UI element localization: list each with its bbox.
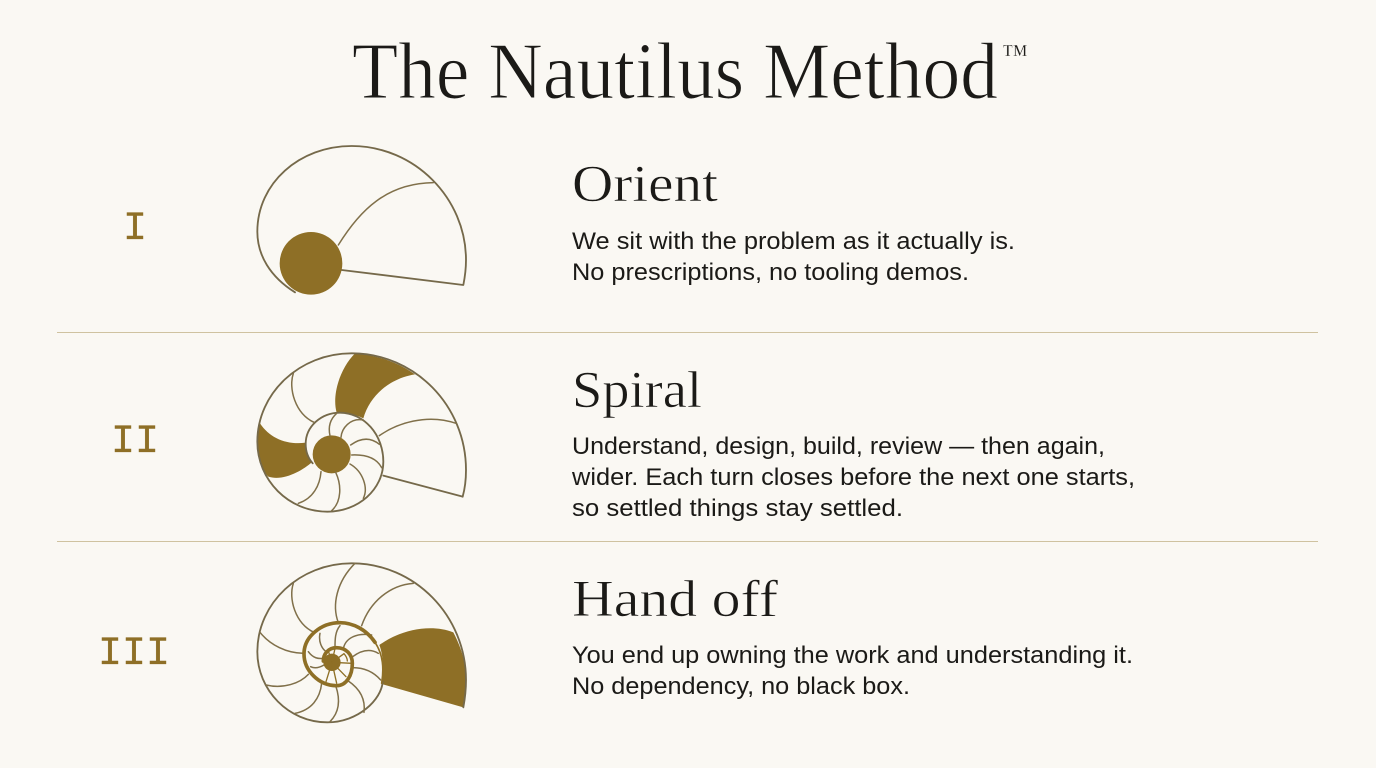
text: Orient description: No prescriptions, no tooling demos. xyxy=(572,259,969,286)
icon: shell stage three xyxy=(257,563,466,722)
text: Orient description: We sit with the problem as it actually is. xyxy=(572,228,1015,255)
text: Spiral description: Understand, design, build, review — then again, xyxy=(572,433,1105,460)
text: Spiral description: wider. Each turn closes before the next one starts, xyxy=(571,464,1135,491)
text: Hand off description xyxy=(572,642,1133,700)
numeral II: II xyxy=(111,420,159,465)
text: Spiral description: so settled things stay settled. xyxy=(572,495,903,522)
text: Hand off description: No dependency, no black box. xyxy=(572,673,910,700)
heading: Hand off: Hand off xyxy=(572,571,779,628)
icon: shell stage one xyxy=(257,146,466,295)
numeral III: III xyxy=(98,632,170,677)
icon: shell stage two xyxy=(257,353,466,512)
text: Orient description xyxy=(572,228,1015,286)
text: Spiral description xyxy=(571,433,1135,522)
title: ™ xyxy=(1002,40,1028,70)
title: The Nautilus Method xyxy=(352,28,998,116)
text: Hand off description: You end up owning the work and understanding it. xyxy=(572,642,1133,669)
numeral I: I xyxy=(123,207,147,252)
heading: Orient: Orient xyxy=(572,156,719,213)
heading: Spiral: Spiral xyxy=(572,362,702,419)
